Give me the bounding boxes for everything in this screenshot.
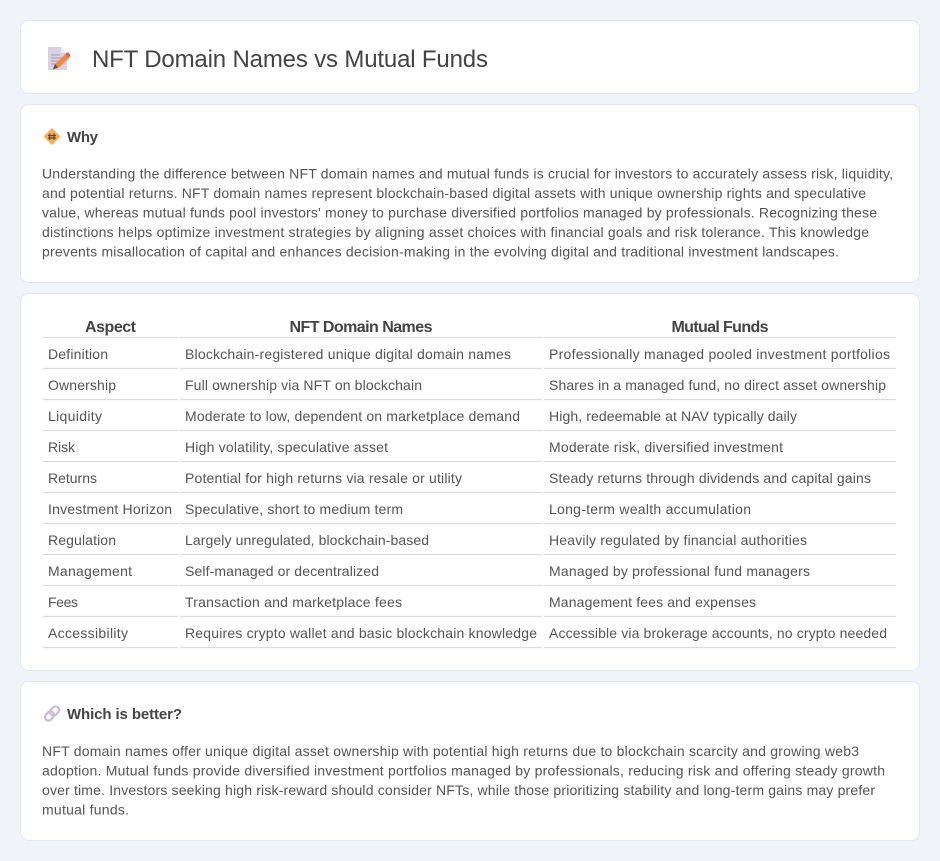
- text block: verdict: over time. Investors seeking high risk-reward should consider NFTs, while those prioritizing stability and long-term gains may prefer: [42, 782, 875, 798]
- table row: risk: High volatility, speculative asset: [185, 439, 388, 455]
- heading: why: Why: [67, 129, 99, 146]
- text block: why explanation: Understanding the difference between NFT domain names and mutual funds is crucial for investors to accurately assess risk, liquidity,: [42, 165, 893, 181]
- text block: verdict: mutual funds.: [42, 802, 129, 818]
- table row: accessibility: [43, 625, 896, 648]
- icon: chain link: [43, 705, 61, 722]
- text block: verdict: [42, 743, 885, 818]
- table row: risk: [43, 439, 896, 462]
- panel: which is better: [20, 682, 920, 840]
- table row: liquidity: High, redeemable at NAV typically daily: [549, 408, 797, 424]
- table row: definition: [43, 346, 896, 368]
- table row: ownership: Full ownership via NFT on blockchain: [185, 377, 422, 393]
- table row: regulation: Largely unregulated, blockchain-based: [185, 532, 429, 548]
- table row: ownership: Shares in a managed fund, no direct asset ownership: [549, 377, 886, 393]
- table row: regulation: Regulation: [48, 532, 116, 548]
- table header row: Mutual Funds: [672, 319, 769, 336]
- table row: investment horizon: Speculative, short to medium term: [185, 501, 403, 517]
- panel: comparison table: [20, 294, 920, 670]
- table row: liquidity: Liquidity: [48, 408, 102, 424]
- table header row: NFT Domain Names: [290, 319, 433, 336]
- table row: investment horizon: Investment Horizon: [48, 501, 172, 517]
- table row: risk: Moderate risk, diversified investment: [549, 439, 783, 455]
- table row: management: Self-managed or decentralized: [185, 563, 379, 579]
- table row: management: [43, 563, 896, 586]
- table row: fees: [43, 594, 896, 616]
- text block: why explanation: [42, 165, 893, 260]
- title: NFT Domain Names vs Mutual Funds: [92, 46, 488, 73]
- text block: verdict: NFT domain names offer unique digital asset ownership with potential high returns due to blockchain scarcity and growing web3: [42, 743, 859, 759]
- table row: risk: Risk: [48, 439, 76, 455]
- table header row: [43, 319, 896, 338]
- panel: why: [20, 104, 920, 282]
- table row: management: Managed by professional fund managers: [549, 563, 810, 579]
- table row: fees: Fees: [48, 594, 78, 610]
- table row: returns: [43, 470, 896, 492]
- table row: fees: Transaction and marketplace fees: [185, 594, 402, 610]
- table row: accessibility: Accessible via brokerage accounts, no crypto needed: [549, 625, 887, 641]
- table row: investment horizon: Long-term wealth accumulation: [549, 501, 751, 517]
- text block: why explanation: and potential returns. NFT domain names represent blockchain-based digital assets with unique ownership rights and speculative: [42, 185, 866, 201]
- icon: orange diamond: [44, 128, 60, 145]
- table row: returns: Potential for high returns via resale or utility: [185, 470, 462, 486]
- table row: regulation: Heavily regulated by financial authorities: [549, 532, 807, 548]
- table row: accessibility: Accessibility: [48, 625, 128, 641]
- table row: definition: Blockchain-registered unique digital domain names: [185, 346, 511, 362]
- table row: liquidity: Moderate to low, dependent on marketplace demand: [185, 408, 520, 424]
- table row: accessibility: Requires crypto wallet and basic blockchain knowledge: [185, 625, 537, 641]
- table row: regulation: [43, 532, 896, 554]
- text block: verdict: adoption. Mutual funds provide diversified investment portfolios managed by professionals, reducing risk and offering steady growth: [42, 763, 885, 779]
- text block: why explanation: prevents misallocation of capital and enhances decision-making in the evolving digital and traditional investment landscapes.: [42, 244, 839, 260]
- table row: definition: Professionally managed pooled investment portfolios: [549, 346, 890, 362]
- table row: investment horizon: [43, 501, 896, 524]
- table row: fees: Management fees and expenses: [549, 594, 756, 610]
- table row: definition: Definition: [48, 346, 108, 362]
- table row: returns: Steady returns through dividends and capital gains: [549, 470, 871, 486]
- heading: which is better: Which is better?: [67, 706, 182, 723]
- table row: liquidity: [43, 408, 896, 430]
- panel: header: [20, 20, 920, 94]
- table row: ownership: Ownership: [48, 377, 116, 393]
- text block: why explanation: distinctions helps optimize investment strategies by aligning asset choices with financial goals and risk tolerance. This knowledge: [42, 224, 869, 240]
- table row: ownership: [43, 377, 896, 400]
- table header row: Aspect: [85, 319, 137, 336]
- table row: management: Management: [48, 563, 132, 579]
- icon: memo with pencil: [48, 47, 70, 70]
- table row: returns: Returns: [48, 470, 97, 486]
- text block: why explanation: value, whereas mutual funds pool investors' money to purchase diversified portfolios managed by professionals. Recognizing these: [42, 205, 877, 221]
